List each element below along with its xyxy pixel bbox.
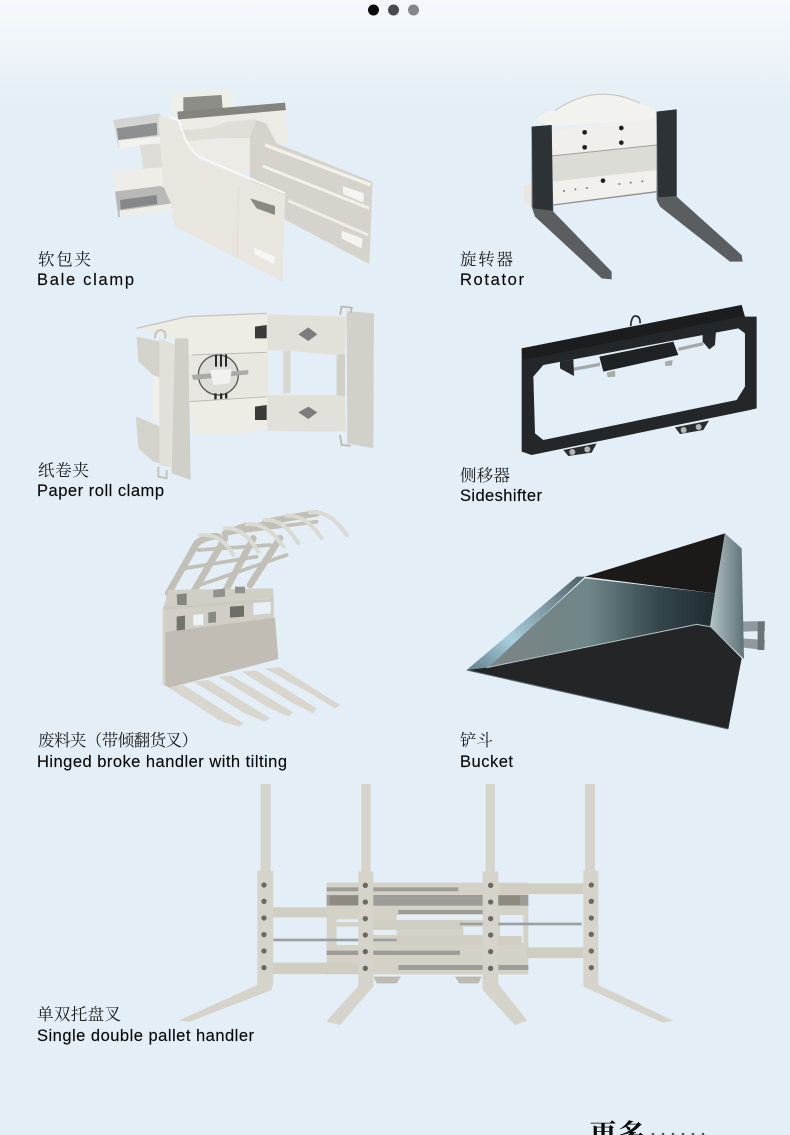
carousel dots — [368, 4, 419, 16]
label: bucket — [460, 731, 513, 771]
label: bale clamp: Bale clamp — [37, 271, 134, 289]
product image: single double pallet handler — [178, 784, 673, 1025]
label: rotator: 旋转器 — [460, 250, 514, 269]
label: bale clamp — [37, 250, 134, 289]
product image: bucket — [467, 533, 765, 729]
label: sideshifter: Sideshifter — [460, 487, 542, 505]
label: single double pallet handler: 单双托盘叉 — [37, 1005, 121, 1024]
label: bale clamp: 软包夹 — [38, 250, 91, 269]
label: hinged broke handler: Hinged broke handler with tilting — [37, 753, 287, 771]
product image: rotator — [523, 93, 743, 279]
more link — [589, 1119, 704, 1135]
label: single double pallet handler — [37, 1005, 254, 1045]
label: paper roll clamp: 纸卷夹 — [38, 461, 89, 480]
label: bucket: 铲斗 — [460, 731, 493, 750]
product image: sideshifter — [522, 305, 757, 456]
label: single double pallet handler: Single double pallet handler — [37, 1027, 254, 1045]
label: hinged broke handler — [37, 731, 287, 771]
page background — [0, 0, 790, 110]
label: rotator — [460, 250, 524, 289]
label: rotator: Rotator — [460, 271, 524, 289]
label: sideshifter — [460, 466, 542, 505]
product image: bale clamp — [113, 90, 373, 282]
product image: hinged broke handler — [163, 512, 347, 727]
label: paper roll clamp — [37, 461, 164, 500]
label: bucket: Bucket — [460, 753, 513, 771]
product image: paper roll clamp — [136, 307, 374, 480]
label: hinged broke handler: 废料夹（带倾翻货叉） — [38, 731, 198, 750]
label: sideshifter: 侧移器 — [460, 466, 510, 485]
label: paper roll clamp: Paper roll clamp — [37, 482, 164, 500]
